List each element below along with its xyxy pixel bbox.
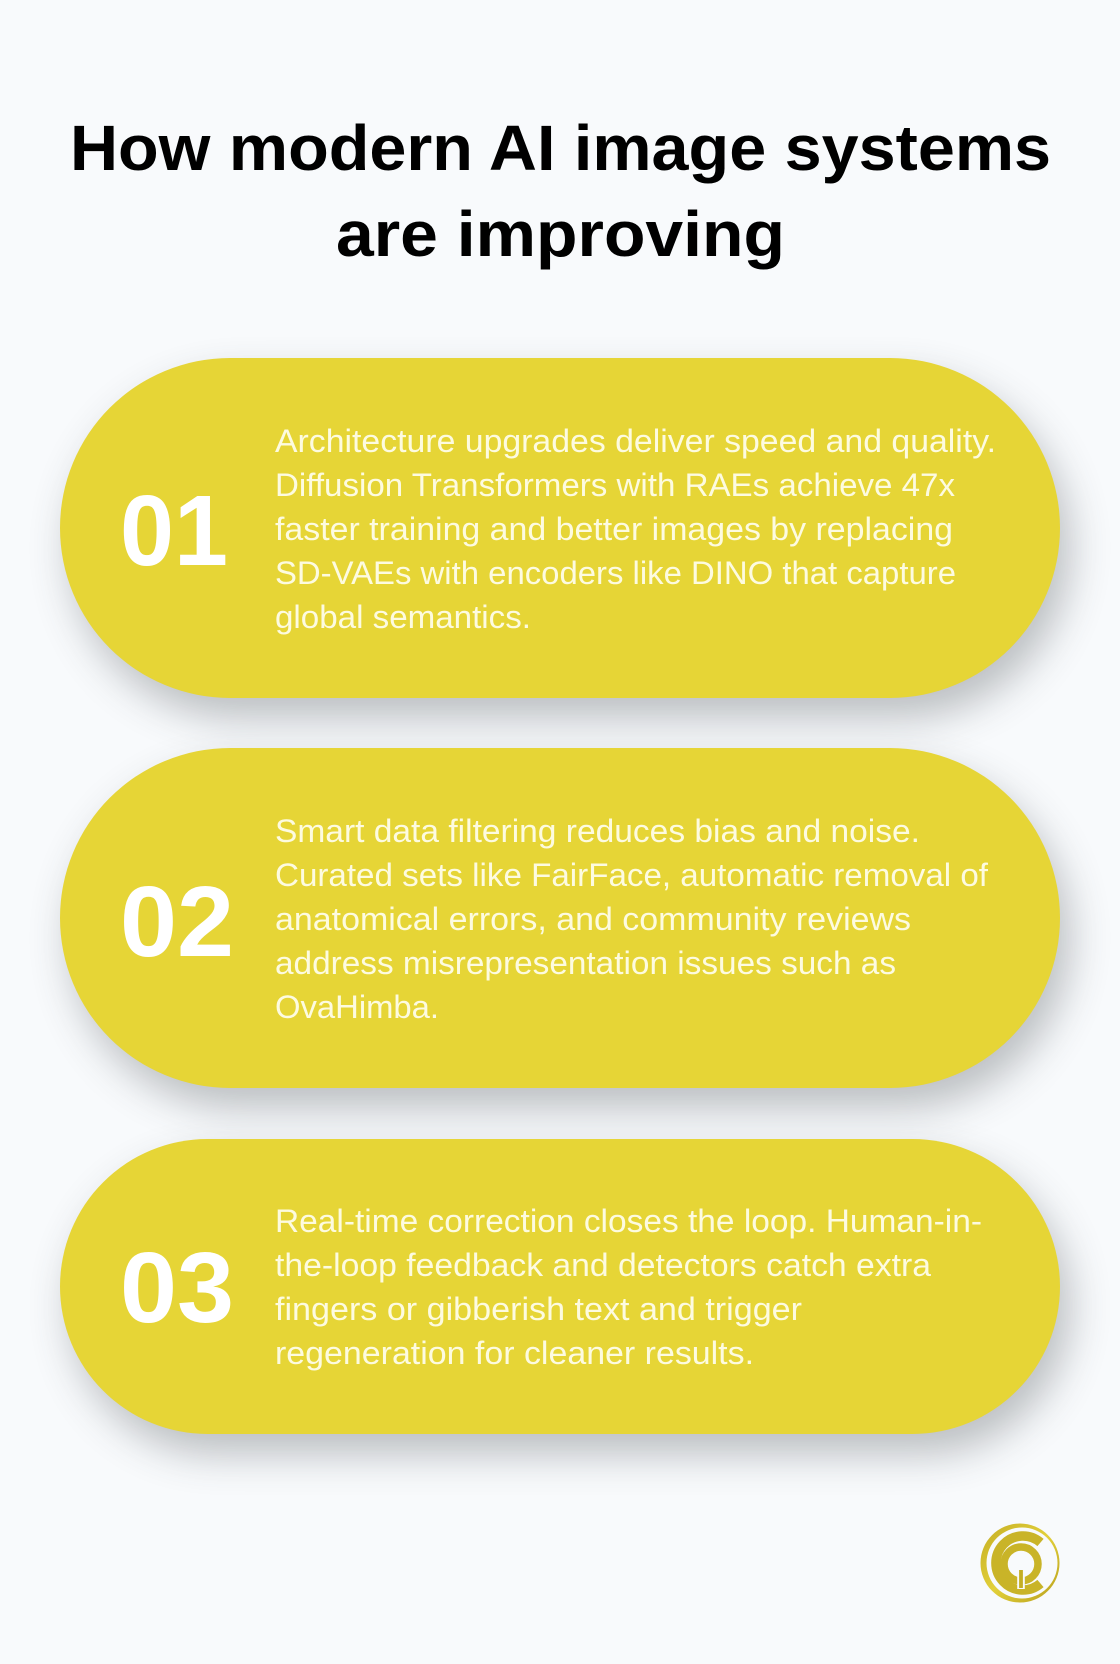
icon: gold CQ logo (980, 1524, 1060, 1602)
panel: step 03 real-time correction (60, 1139, 1060, 1434)
text block: real-time correction: the-loop feedback and detectors catch extra (275, 1247, 931, 1283)
panel: step 02 smart data filtering (60, 748, 1060, 1088)
title: How modern AI image systems (70, 112, 1051, 184)
text block: smart data filtering: Curated sets like FairFace, automatic removal of (275, 857, 988, 893)
text block: real-time correction: fingers or gibberish text and trigger (275, 1291, 802, 1327)
text block: architecture upgrades: faster training and better images by replacing (275, 511, 953, 547)
text block: architecture upgrades: global semantics. (275, 599, 531, 635)
text block: smart data filtering (275, 813, 988, 1025)
number 02: 02 (120, 866, 234, 978)
text block: real-time correction: regeneration for cleaner results. (275, 1335, 754, 1371)
text block: real-time correction (275, 1203, 982, 1371)
text block: architecture upgrades: Architecture upgrades deliver speed and quality. (275, 423, 996, 459)
text block: architecture upgrades (275, 423, 996, 635)
text block: smart data filtering: OvaHimba. (275, 989, 439, 1025)
text block: smart data filtering: anatomical errors, and community reviews (275, 901, 911, 937)
text block: architecture upgrades: SD-VAEs with encoders like DINO that capture (275, 555, 956, 591)
number 01: 01 (120, 475, 228, 587)
title: are improving (336, 198, 785, 270)
number 03: 03 (120, 1232, 234, 1344)
text block: architecture upgrades: Diffusion Transformers with RAEs achieve 47x (275, 467, 955, 503)
text block: smart data filtering: address misrepresentation issues such as (275, 945, 896, 981)
text block: smart data filtering: Smart data filtering reduces bias and noise. (275, 813, 920, 849)
text block: real-time correction: Real-time correction closes the loop. Human-in- (275, 1203, 982, 1239)
panel: step 01 architecture upgrades (60, 358, 1060, 698)
title (70, 112, 1051, 270)
